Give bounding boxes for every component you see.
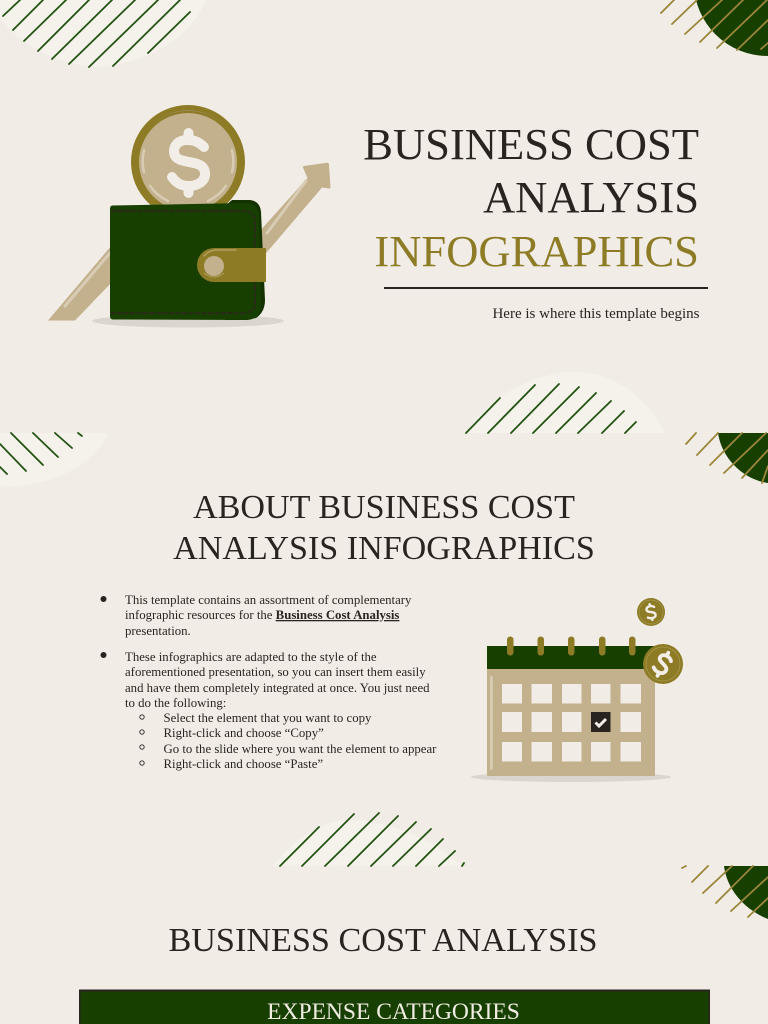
calendar shadow	[471, 772, 671, 782]
title: ANALYSIS	[483, 172, 699, 222]
title divider	[384, 287, 708, 289]
second bullet: aforementioned presentation, so you can insert them easily	[125, 665, 426, 679]
first bullet: This template contains an assortment of complementary	[125, 593, 412, 607]
title: INFOGRAPHICS	[374, 226, 699, 276]
title: BUSINESS COST	[363, 119, 699, 169]
sub-list: Right-click and choose “Copy”	[164, 726, 324, 740]
heading: about: ABOUT BUSINESS COST	[193, 489, 575, 526]
first bullet: infographic resources for the Business Cost Analysis	[125, 608, 399, 622]
illustration: calendar with coins	[471, 598, 683, 782]
heading: about: ANALYSIS INFOGRAPHICS	[173, 530, 595, 567]
sub-list: Go to the slide where you want the element to appear	[164, 742, 437, 756]
second bullet: These infographics are adapted to the style of the	[125, 650, 377, 664]
sub-list: Right-click and choose “Paste”	[164, 757, 323, 771]
decoration: top-left striped blob	[0, 0, 206, 67]
small coin	[637, 598, 665, 626]
rising arrow	[48, 163, 330, 320]
wallet clasp	[197, 248, 266, 282]
text block: about description	[100, 593, 437, 771]
decoration: middle-right striped blob	[466, 372, 664, 433]
wallet body	[110, 200, 265, 320]
wallet shadow	[92, 314, 284, 328]
large coin	[643, 644, 683, 684]
calendar rings	[507, 636, 636, 656]
coin	[131, 105, 245, 219]
heading: about	[173, 489, 595, 567]
table header: expense categories	[79, 990, 710, 1024]
subtitle: Here is where this template begins	[492, 306, 700, 322]
decoration: lower-centre striped blob	[273, 813, 464, 866]
sub-list: Select the element that you want to copy	[164, 711, 372, 725]
title	[363, 119, 699, 276]
calendar header	[487, 646, 655, 669]
decoration: lower-right green circle with gold stripes	[682, 866, 768, 919]
second bullet: and have them completely integrated at once. You just need	[125, 681, 430, 695]
first bullet	[100, 593, 412, 638]
heading: business cost analysis: BUSINESS COST ANALYSIS	[168, 922, 598, 959]
first bullet: presentation.	[125, 624, 191, 638]
decoration: middle-left striped blob	[0, 433, 108, 486]
calendar cells	[502, 684, 641, 762]
checked day	[591, 712, 610, 732]
second bullet: to do the following:	[125, 696, 226, 710]
sub-list	[140, 711, 437, 771]
calendar body	[487, 669, 655, 776]
illustration: wallet with coin and rising arrow	[48, 105, 330, 328]
second bullet	[100, 650, 430, 710]
decoration: top-right green circle with gold stripes	[661, 0, 768, 56]
decoration: middle-right green circle with gold stripes	[686, 433, 768, 483]
